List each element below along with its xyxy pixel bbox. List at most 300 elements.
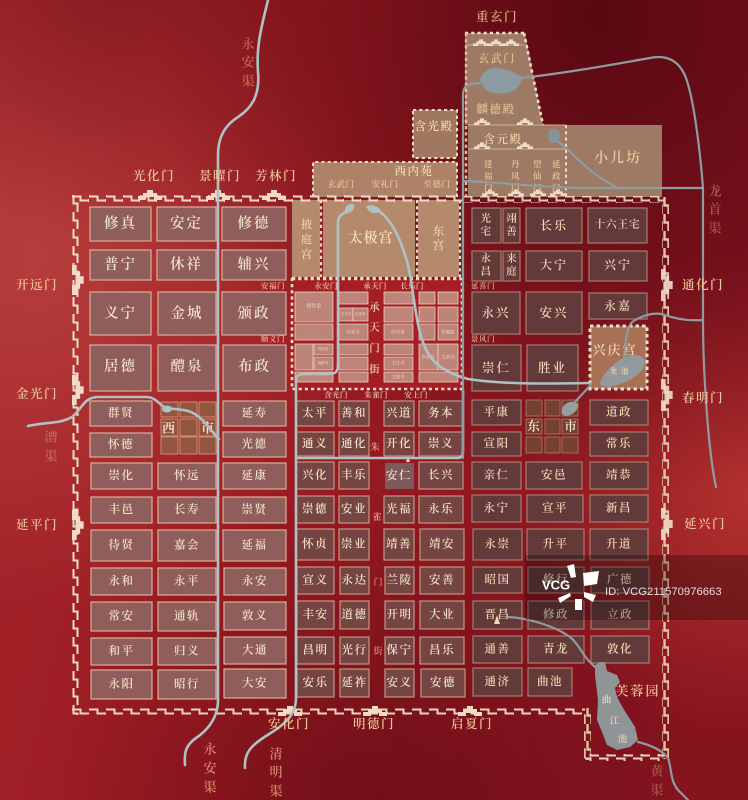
ward: 昭国 — [473, 567, 522, 593]
offices: 军器监 — [441, 328, 455, 336]
ward: 常安 — [91, 602, 152, 631]
ward: 靖恭: 靖恭 — [606, 468, 632, 482]
ward: 永平: 永平 — [174, 574, 200, 588]
ward: 广德: 广德 — [607, 572, 633, 586]
ward: 怀远: 怀远 — [174, 468, 200, 482]
ward: 兰陵: 兰陵 — [386, 572, 412, 586]
canal labels: 黄 — [650, 764, 664, 778]
ward: 升平: 升平 — [542, 536, 568, 550]
ward: 安仁 — [385, 456, 414, 489]
ward: 和平 — [91, 638, 152, 665]
ward: 永阳 — [91, 670, 152, 699]
canal labels: 渠 — [650, 782, 664, 798]
ward: 崇贤 — [223, 497, 286, 523]
ward: 安业: 安业 — [341, 502, 367, 516]
ward: 翊善: 善 — [506, 224, 517, 238]
gate labels: 光化门 — [133, 168, 175, 183]
ward: 敦化: 敦化 — [607, 642, 633, 656]
ward: 道德 — [340, 601, 369, 629]
ward: 兰陵 — [385, 567, 414, 594]
ward: 安业 — [339, 496, 369, 523]
river: Longshou channels through city — [373, 208, 590, 384]
ward: 光行 — [340, 637, 369, 664]
ward: 普宁: 普宁 — [104, 256, 137, 273]
ward: 安义 — [385, 669, 414, 697]
panel: west wards — [90, 207, 286, 699]
offices: 太常寺 — [391, 374, 405, 380]
panel: West inner garden: 安礼门 — [371, 179, 399, 189]
ward: 太平: 太平 — [302, 406, 328, 420]
ward: 保宁 — [385, 637, 414, 664]
ward: 兴道 — [384, 401, 414, 426]
panel: East Market: 市 — [564, 418, 578, 434]
ward: 永嘉: 永嘉 — [604, 298, 632, 313]
ward: 崇德: 崇德 — [302, 502, 328, 516]
ward: 群贤: 群贤 — [108, 406, 134, 420]
ward: 颁政: 颁政 — [238, 305, 270, 322]
ward: 永兴 — [472, 292, 520, 334]
ward: 通化 — [339, 432, 369, 456]
Zhuque street label: 朱 — [370, 441, 380, 452]
panel: central wards — [296, 401, 465, 697]
ward: 崇义 — [419, 432, 463, 456]
ward: 延寿: 延寿 — [242, 406, 268, 420]
ward: 开化: 开化 — [386, 436, 412, 450]
ward: 和平: 和平 — [108, 644, 134, 658]
panel: northern palace Daming: 丹 — [511, 159, 521, 169]
ward: 大业 — [420, 601, 464, 629]
offices: · · — [351, 375, 355, 379]
pond: West Market — [162, 406, 172, 412]
ward: 通轨: 通轨 — [174, 608, 200, 622]
ward: 延康: 延康 — [242, 468, 268, 482]
panel: northern palace Daming: 延 — [552, 159, 562, 169]
ward: 青龙: 青龙 — [543, 642, 569, 656]
pond: Long pool: 龙池 — [610, 366, 632, 376]
gate labels: 顺义门 — [261, 334, 285, 344]
offices: · · · · — [349, 296, 357, 300]
ward: 大宁 — [526, 251, 582, 281]
panel: West inner garden: 西内苑 — [394, 164, 434, 178]
panel: northern palace Daming: 凤 — [511, 171, 521, 181]
ward: 光宅: 光 — [480, 212, 492, 224]
ward: 宣义: 宣义 — [302, 574, 328, 586]
ward: 永崇 — [473, 529, 522, 560]
gate labels: 开远门 — [16, 277, 58, 292]
offices: · · · · — [349, 347, 357, 351]
ward: 修行: 修行 — [543, 572, 569, 586]
Chengtian street label: 门 — [369, 342, 381, 354]
ward: 修政 — [528, 601, 584, 629]
ward: 务本 — [419, 401, 463, 426]
panel: imperial city: 安上门 — [404, 390, 428, 400]
pond: Qujiang: 曲 — [602, 694, 612, 706]
ward: 光福: 光福 — [386, 502, 412, 516]
ward: 永达 — [340, 567, 369, 594]
ward: 通义 — [296, 432, 334, 456]
ward: 光福 — [384, 496, 414, 523]
pond: East Market — [561, 402, 578, 416]
ward: 永阳: 永阳 — [108, 678, 134, 690]
ward: 大通 — [224, 637, 286, 664]
ward: 长寿: 长寿 — [174, 502, 200, 516]
ward: 延祚: 延祚 — [342, 675, 368, 689]
river: north channels and Longshou canal — [463, 57, 716, 487]
canal labels: 渠 — [203, 780, 217, 794]
ward: 光德: 光德 — [242, 436, 268, 450]
ward: 辅兴 — [222, 250, 286, 280]
river: Huang canal — [508, 617, 688, 800]
ward: 崇义: 崇义 — [428, 436, 454, 450]
panel: northern palace Daming: 政 — [552, 171, 562, 181]
panel: imperial city — [292, 279, 462, 400]
pond: Long pool — [600, 355, 645, 387]
pond: north lake — [480, 68, 523, 94]
ward: 修行 — [528, 567, 584, 593]
panel: northern palace Daming: 门 — [484, 183, 494, 193]
ward: 敦化 — [591, 636, 649, 663]
panel: East Market: 东 — [527, 418, 541, 434]
ward: 大安: 大安 — [242, 676, 268, 690]
ward: 昌明 — [297, 637, 334, 664]
ward: 延寿 — [223, 401, 286, 426]
ward: 敦义: 敦义 — [242, 608, 268, 622]
ward: 安仁: 安仁 — [386, 468, 412, 482]
ward: 道政 — [590, 400, 648, 425]
offices: 内侍省 — [318, 346, 329, 351]
panel: imperial city: 朱雀门 — [364, 390, 388, 400]
ward: 通义: 通义 — [302, 437, 328, 450]
ward: 宣阳 — [472, 432, 521, 456]
gate labels: 金光门 — [16, 386, 58, 401]
ward: 安定 — [157, 207, 216, 241]
ward: 崇德 — [296, 496, 334, 523]
ward: 普宁 — [90, 250, 151, 280]
panel: northern palace Daming: 小儿坊 — [594, 150, 642, 166]
ward: 靖安: 靖安 — [429, 536, 455, 550]
gate labels: 安福门 — [261, 280, 285, 290]
river: Yong'an canal — [185, 0, 268, 765]
ward: 长乐 — [526, 208, 582, 243]
ward: 永乐 — [419, 496, 463, 523]
panel: East Market — [526, 400, 578, 453]
ward: 开明: 开明 — [386, 608, 412, 621]
pond: Hanyuan — [548, 129, 560, 143]
ward: 怀远 — [158, 463, 216, 489]
pond: Qujiang — [595, 662, 638, 750]
ward: 立政 — [591, 601, 649, 629]
ward: 怀德: 怀德 — [108, 437, 134, 451]
canal labels: 安 — [241, 54, 255, 70]
ward: 布政 — [223, 345, 286, 391]
panel: Yeting palace: 宫 — [301, 248, 313, 261]
ward: 永和: 永和 — [108, 574, 134, 588]
offices: · · · · — [394, 296, 402, 300]
ward: 升道 — [590, 529, 648, 560]
ward: 大宁: 大宁 — [540, 257, 568, 272]
ward: 长兴 — [419, 462, 463, 489]
ward: 崇业: 崇业 — [341, 536, 367, 550]
panel: West Market: 市 — [201, 420, 215, 436]
ward: 丰乐 — [339, 462, 369, 489]
canal labels: 安 — [203, 760, 217, 776]
ward: 太平 — [296, 401, 334, 426]
ward: 崇仁: 崇仁 — [482, 360, 511, 375]
ward: 光德 — [223, 432, 286, 457]
ward: 广德 — [591, 567, 649, 593]
label: Furong garden: 芙蓉园 — [615, 684, 661, 698]
ward: 靖安 — [420, 529, 464, 560]
ward: 长寿 — [158, 497, 216, 523]
gate labels: 延平门 — [16, 517, 58, 532]
ward: 安兴 — [526, 292, 582, 334]
river: Cao canal with west market — [28, 397, 219, 439]
ward: 兴道: 兴道 — [386, 406, 412, 420]
river: branch to Xingqing palace — [624, 314, 703, 358]
ward: 通善: 通善 — [484, 642, 510, 656]
Zhuque street label — [370, 441, 383, 656]
ward: 永崇: 永崇 — [484, 536, 510, 550]
panel: east wards — [472, 208, 649, 696]
offices: 太府寺 — [441, 354, 455, 360]
ward: 务本: 务本 — [428, 406, 454, 420]
panel: East palace: 东 — [433, 224, 445, 238]
ward: 来庭 — [503, 251, 520, 281]
ward: 亲仁: 亲仁 — [484, 468, 510, 482]
gate labels: 延喜门 — [471, 280, 495, 290]
ward: 延祚 — [340, 669, 369, 697]
ward: 待贤: 待贤 — [108, 538, 134, 552]
ward: 群贤 — [90, 401, 152, 426]
palace dividers — [292, 200, 460, 390]
offices: 太仆寺 — [391, 360, 405, 366]
ward: 永嘉 — [589, 293, 647, 319]
ward: 昌明: 昌明 — [302, 644, 328, 656]
panel: Taiji palace: 太极宫 — [348, 230, 394, 246]
ward: 升平 — [527, 529, 584, 560]
ward: 修德 — [222, 207, 286, 241]
offices: 宗正寺 — [341, 311, 352, 316]
ward: 兴宁: 兴宁 — [604, 257, 632, 272]
ward: 修真: 修真 — [104, 214, 137, 232]
ward: 宣阳: 宣阳 — [484, 437, 510, 450]
ward: 醴泉: 醴泉 — [170, 357, 204, 375]
ward: 昌乐: 昌乐 — [429, 642, 455, 656]
ward: 永宁: 永宁 — [484, 500, 510, 514]
offices: · · · · — [394, 347, 402, 351]
panel: northern palace Daming: 麟德殿 — [476, 102, 516, 116]
ward: 丰安: 丰安 — [302, 607, 328, 621]
ward: 安乐 — [297, 669, 334, 697]
canal labels: 清 — [269, 746, 283, 762]
panel: imperial city: 承天门 — [363, 280, 387, 290]
ward: 永和 — [91, 568, 152, 595]
canal labels: 渠 — [241, 74, 255, 88]
ward: 安定: 安定 — [170, 215, 203, 232]
ward: 靖善: 靖善 — [386, 536, 412, 550]
ward: 道德: 道德 — [342, 607, 368, 621]
ward: 修德: 修德 — [238, 215, 270, 232]
ward: 延福 — [223, 530, 286, 561]
ward: 光行: 光行 — [342, 642, 368, 656]
river: inner rectangle — [296, 390, 463, 458]
ward: 丰邑: 丰邑 — [108, 502, 134, 516]
ward: 大通: 大通 — [242, 642, 268, 656]
gate labels: 通化门 — [682, 277, 724, 292]
panel: northern palace Daming: 门 — [511, 183, 521, 193]
ward: 安义: 安义 — [386, 675, 412, 689]
ward: 永乐: 永乐 — [428, 502, 454, 516]
ward: 兴宁 — [589, 251, 647, 281]
ward: 胜业: 胜业 — [538, 360, 567, 375]
panel: West inner garden: 玄武门 — [327, 179, 355, 189]
canal labels: 渠 — [44, 448, 58, 464]
ward: 颁政 — [222, 292, 286, 335]
ward: 大安 — [224, 669, 286, 698]
Chengtian street label — [369, 302, 381, 376]
ward: 靖善 — [384, 529, 414, 560]
ward: 胜业 — [527, 345, 578, 391]
ward: 怀贞: 怀贞 — [302, 536, 328, 550]
ward: 永昌: 昌 — [480, 266, 492, 278]
panel: East palace: 宫 — [433, 238, 445, 252]
panel: imperial city: 长乐门 — [400, 280, 424, 290]
ward: 立政: 立政 — [607, 607, 633, 621]
ward: 金城 — [158, 292, 216, 335]
ward: 怀德 — [90, 433, 152, 457]
ward: 丰安 — [297, 601, 334, 629]
gate labels: 延兴门 — [684, 516, 726, 531]
offices: · · · — [350, 361, 356, 365]
Chengtian street label: 天 — [369, 322, 381, 334]
ward: 醴泉 — [158, 345, 216, 391]
ward: 崇化: 崇化 — [108, 468, 134, 482]
panel: West inner garden: 至德门 — [423, 179, 451, 189]
ward: 兴化: 兴化 — [302, 468, 328, 482]
ward: 归义 — [158, 638, 216, 665]
ward: 常乐: 常乐 — [606, 436, 632, 450]
ward: 宣平: 宣平 — [542, 502, 568, 514]
ward: 待贤 — [91, 530, 152, 561]
ward: 居德: 居德 — [104, 358, 137, 375]
canal labels: 明 — [269, 764, 283, 780]
offices: · · · · — [434, 375, 442, 379]
ward: 修政: 修政 — [543, 607, 569, 621]
river: palace teardrop ponds — [345, 204, 380, 214]
panel: imperial city: 含光门 — [324, 390, 348, 400]
offices: · · · · — [310, 330, 318, 334]
canal labels: 漕 — [44, 430, 58, 444]
ward: 义宁 — [90, 292, 151, 335]
ward: 平康: 平康 — [484, 406, 510, 418]
ward: 永宁 — [472, 495, 521, 522]
ward: 崇贤: 崇贤 — [242, 502, 268, 516]
ward: 布政: 布政 — [238, 358, 271, 375]
canal labels: 永 — [203, 742, 217, 756]
ward: 通济: 通济 — [484, 674, 510, 688]
panel: West inner garden — [313, 162, 457, 197]
panel: northern palace Daming: 玄武门 — [478, 51, 516, 65]
gate labels: 安化门 — [268, 716, 310, 731]
ward: 保宁: 保宁 — [386, 642, 412, 656]
ward: 安邑 — [526, 462, 582, 489]
canal labels: 龙 — [708, 184, 722, 198]
gate labels: 景风门 — [471, 334, 495, 344]
watermark: VCG — [542, 578, 570, 592]
ward: 平康 — [472, 400, 521, 425]
offices: · · · · — [394, 312, 402, 316]
ward: 崇业 — [339, 529, 369, 560]
ward: 敦义 — [224, 602, 286, 630]
panel: Yeting palace — [292, 200, 320, 277]
ward: 安兴: 安兴 — [539, 305, 569, 320]
panel: northern palace Daming: 含元殿 — [484, 132, 522, 146]
ward: 金城: 金城 — [170, 304, 204, 322]
ward: 安德: 安德 — [430, 675, 456, 689]
ward: 十六王宅: 十六王宅 — [594, 218, 640, 230]
ward: 归义: 归义 — [174, 644, 200, 658]
ward: 长乐: 长乐 — [540, 218, 568, 232]
river: Qingming canal — [245, 208, 350, 768]
ward: 安德 — [421, 669, 465, 697]
Zhuque street label: 门 — [373, 576, 383, 587]
panel: East palace — [418, 200, 459, 277]
offices: 鸿胪寺 — [318, 360, 329, 365]
canal labels: 永 — [241, 36, 255, 52]
panel: northern palace Daming: 仙 — [533, 171, 543, 181]
panel: Yeting palace: 庭 — [301, 232, 313, 246]
canal labels: 首 — [708, 202, 722, 216]
ward: 通轨 — [158, 602, 216, 631]
ward: 安善 — [420, 567, 464, 594]
gate labels: 重玄门 — [476, 9, 518, 24]
panel: Hanguang hall: 含光殿 — [414, 119, 454, 133]
ward: 通化: 通化 — [341, 436, 367, 450]
offices: 光禄寺 — [355, 311, 366, 316]
panel: Taiji palace — [323, 200, 415, 277]
offices: 少府监 — [421, 354, 435, 360]
ward: 居德 — [90, 345, 151, 391]
ward: 常乐 — [590, 432, 648, 456]
ward: 大业: 大业 — [429, 607, 455, 621]
ward: 安善: 安善 — [429, 572, 455, 586]
ward: 来庭: 庭 — [506, 264, 517, 278]
ward: 翊善: 翊 — [506, 212, 517, 224]
ward: 翊善 — [503, 208, 520, 243]
ward: 休祥 — [157, 250, 216, 280]
Chengtian street label: 街 — [369, 362, 381, 376]
ward: 永兴: 永兴 — [481, 306, 511, 320]
gate labels: 芳林门 — [255, 168, 297, 183]
ward: 通善 — [473, 636, 522, 663]
ward: 永昌 — [472, 251, 501, 281]
offices: 司农寺 — [346, 328, 360, 336]
panel: northern palace Daming: 建 — [484, 159, 494, 169]
ward: 开化 — [384, 432, 414, 456]
ward: 延康 — [223, 463, 286, 489]
ward: 兴化 — [296, 462, 334, 489]
pond: Qujiang: 池 — [618, 733, 628, 745]
ward: 通济 — [473, 668, 522, 696]
ward: 昌乐 — [420, 637, 464, 664]
ward: 长兴: 长兴 — [428, 468, 454, 482]
watermark: ID: VCG211570976663 — [605, 586, 722, 598]
ward: 嘉会: 嘉会 — [174, 538, 200, 552]
ward: 永平 — [158, 568, 216, 595]
offices: 尚书省 — [391, 328, 405, 336]
ward: 安乐: 安乐 — [302, 675, 328, 689]
ward: 昭行: 昭行 — [174, 676, 200, 690]
